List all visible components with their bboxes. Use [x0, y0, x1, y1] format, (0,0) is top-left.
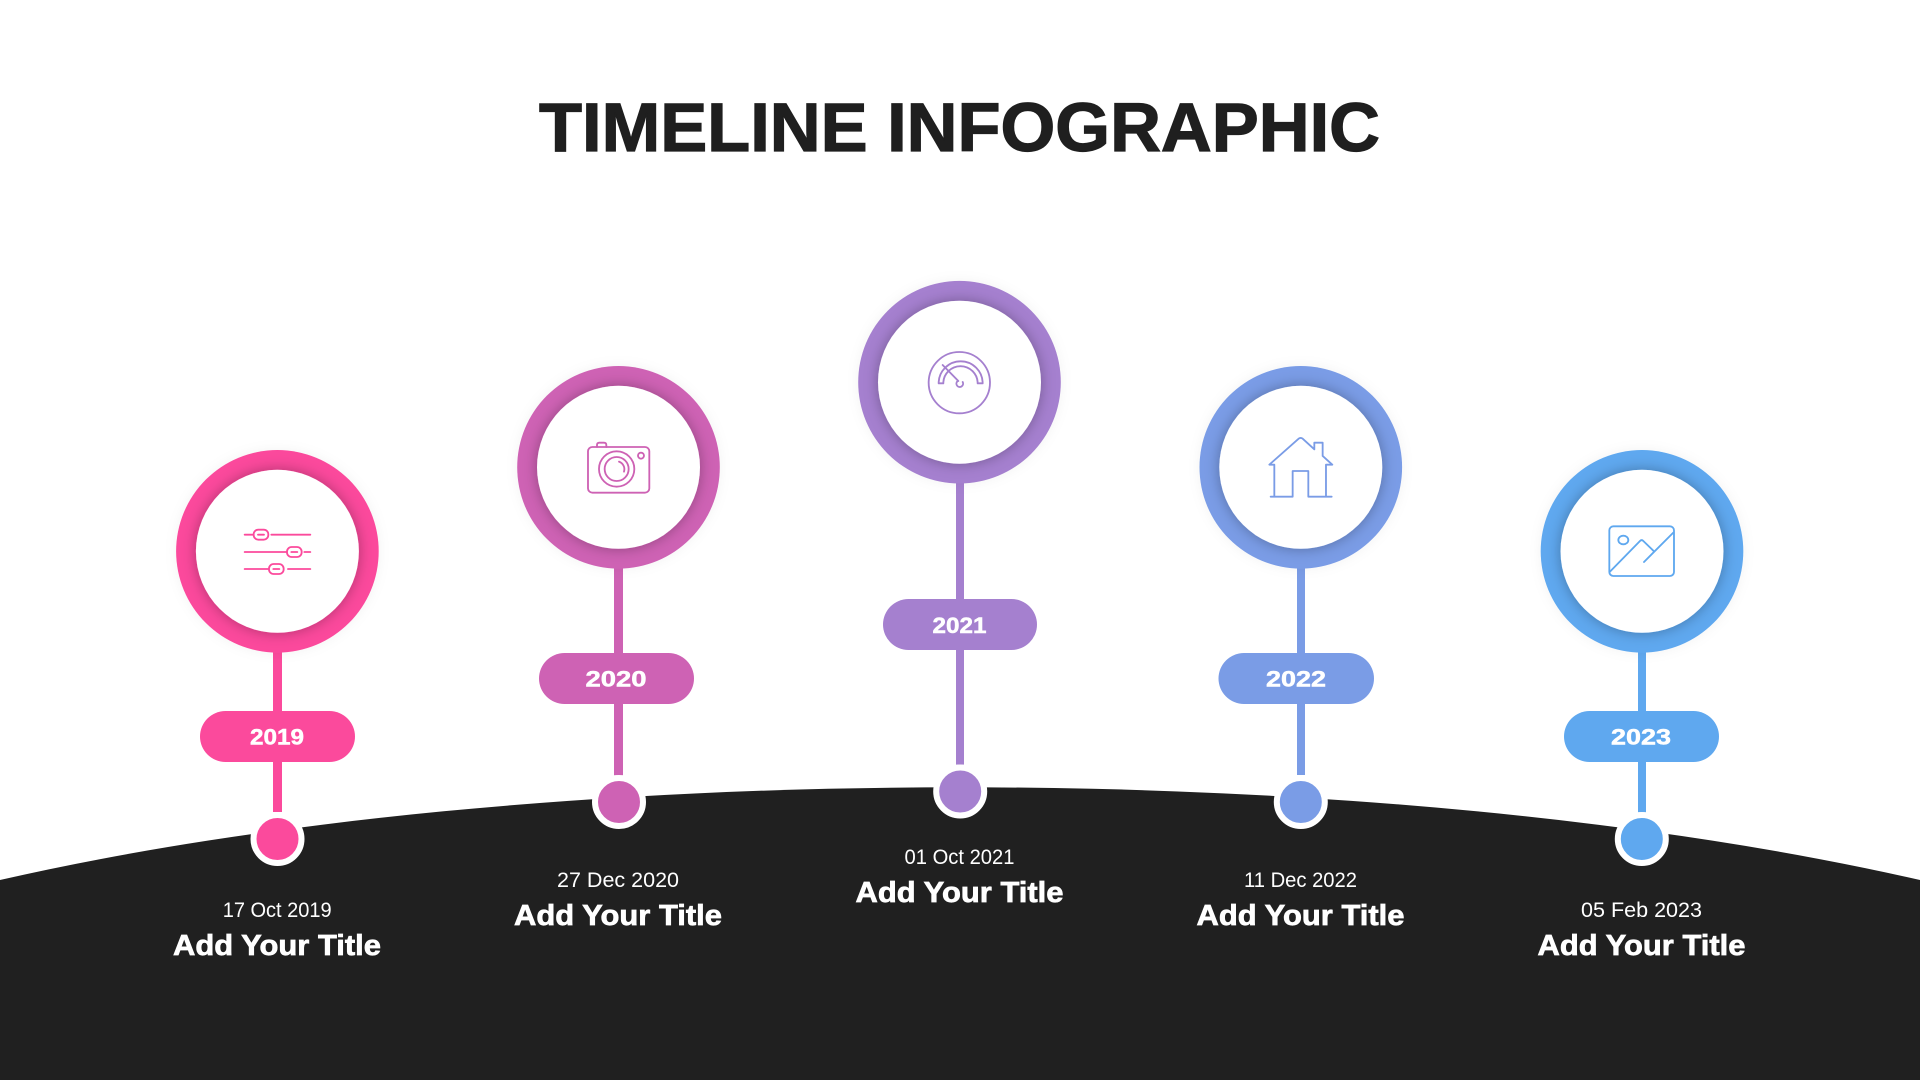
- date and title 2020: Add Your Title: [514, 900, 722, 932]
- year pill 2022: 2022: [1266, 666, 1326, 691]
- date and title 2023: [1538, 899, 1746, 962]
- timeline dot 2020: [595, 778, 643, 826]
- date and title 2022: Add Your Title: [1196, 900, 1404, 932]
- date and title 2019: [173, 899, 381, 962]
- date and title 2023: 05 Feb 2023: [1581, 899, 1702, 922]
- year pill 2020: 2020: [586, 666, 646, 691]
- date and title 2022: [1196, 869, 1404, 932]
- connector line 2022: [1297, 560, 1305, 775]
- icon: sliders: [245, 530, 310, 574]
- year pill 2023: 2023: [1611, 724, 1671, 749]
- ring 2021: [858, 281, 1061, 484]
- date and title 2019: 17 Oct 2019: [223, 899, 332, 922]
- date and title 2023: Add Your Title: [1538, 930, 1746, 962]
- year pill 2019: 2019: [250, 724, 304, 749]
- year pill 2022: [1218, 653, 1374, 704]
- icon: camera: [588, 443, 649, 493]
- date and title 2021: 01 Oct 2021: [904, 846, 1014, 869]
- title: TIMELINE INFOGRAPHIC: [539, 89, 1380, 166]
- timeline item: 2021: [856, 281, 1064, 909]
- connector line 2023: [1638, 640, 1646, 812]
- connector line 2020: [614, 560, 623, 775]
- timeline dot 2023: [1618, 815, 1666, 863]
- icon: gauge: [929, 352, 990, 413]
- connector line 2019: [273, 640, 282, 812]
- year pill 2021: [883, 599, 1037, 650]
- icon: picture: [1609, 526, 1674, 576]
- year pill 2023: [1564, 711, 1719, 762]
- date and title 2021: [856, 846, 1064, 909]
- date and title 2022: 11 Dec 2022: [1244, 869, 1357, 892]
- timeline item: 2023: [1538, 450, 1746, 962]
- date and title 2020: 27 Dec 2020: [557, 869, 679, 892]
- timeline item: 2020: [514, 366, 722, 932]
- ring 2022: [1200, 366, 1402, 569]
- year pill 2020: [539, 653, 694, 704]
- connector line 2021: [956, 475, 964, 765]
- timeline dot 2019: [254, 815, 302, 863]
- ring 2019: [176, 450, 379, 653]
- date and title 2019: Add Your Title: [173, 930, 381, 962]
- year pill 2021: 2021: [932, 613, 986, 638]
- date and title 2020: [514, 869, 722, 932]
- timeline dot 2022: [1277, 778, 1325, 826]
- ring 2020: [517, 366, 720, 569]
- timeline item: 2019: [173, 450, 381, 962]
- icon: house: [1269, 438, 1332, 497]
- timeline item: 2022: [1196, 366, 1404, 932]
- dark curved ground: [0, 787, 1920, 1080]
- date and title 2021: Add Your Title: [856, 877, 1064, 909]
- ring 2023: [1541, 450, 1743, 653]
- timeline dot 2021: [936, 768, 984, 816]
- year pill 2019: [200, 711, 355, 762]
